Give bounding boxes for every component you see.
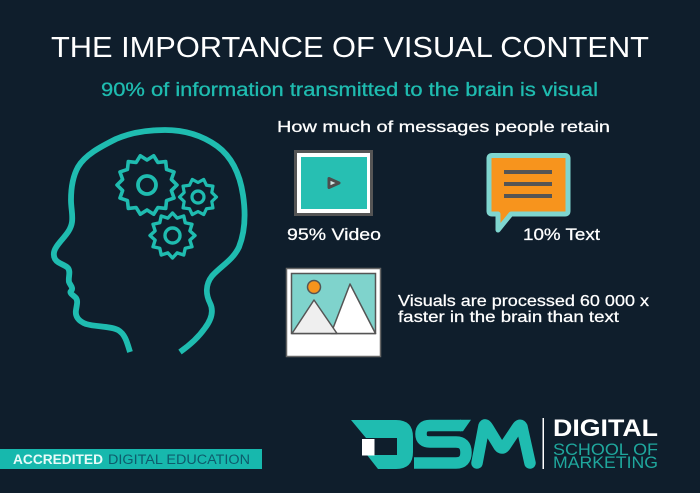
label: video: 95% Video: [287, 225, 381, 244]
logo wordmark: [553, 415, 658, 472]
logo divider: [542, 418, 544, 469]
subtitle: 90% of information transmitted to the brain is visual: [101, 80, 598, 101]
text block: processing speed: [398, 293, 649, 326]
title: THE IMPORTANCE OF VISUAL CONTENT: [51, 32, 649, 64]
logo letter M: [477, 425, 530, 463]
banner: accredited digital education: DIGITAL EDUCATION: [108, 452, 250, 467]
logo wordmark: DIGITAL: [553, 415, 658, 442]
banner: accredited digital education: ACCREDITED: [13, 452, 103, 467]
gear: large: [117, 156, 177, 214]
text lines: [504, 170, 552, 198]
icon: photo: [286, 268, 380, 356]
heading: retention: How much of messages people retain: [277, 119, 610, 136]
icon: head with gears: [54, 130, 245, 352]
banner: accredited digital education: [0, 449, 262, 469]
logo letter S: [414, 420, 471, 463]
text block: processing speed: Visuals are processed 60 000 x: [398, 293, 649, 310]
sun: [308, 280, 320, 294]
text block: processing speed: faster in the brain than text: [398, 309, 620, 326]
right mountain: [331, 284, 376, 334]
logo: DSM: [351, 415, 658, 472]
logo white square: [362, 439, 374, 456]
logo wordmark: MARKETING: [553, 453, 658, 472]
logo wordmark: SCHOOL OF: [553, 440, 658, 459]
label: text: 10% Text: [523, 225, 600, 244]
icon: video: [296, 152, 372, 214]
head outline: [54, 130, 245, 352]
logo letter D: [351, 420, 413, 469]
play symbol: [329, 178, 339, 188]
icon: text speech bubble: [489, 156, 568, 230]
left mountain: [292, 300, 337, 334]
gear: lower: [150, 213, 195, 258]
gear: right: [180, 179, 216, 215]
